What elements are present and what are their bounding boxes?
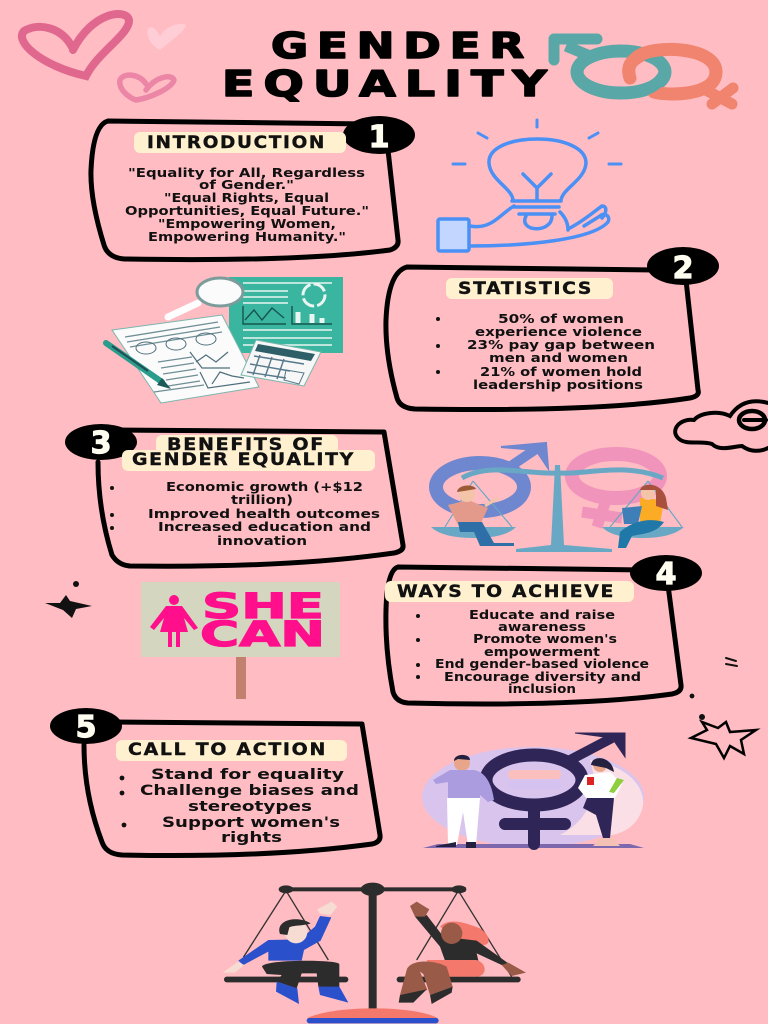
text: slogans: "Empowering Women, [158,217,336,231]
badge: 2 [647,247,719,286]
badge: 4: 4 [656,557,676,592]
scale [431,465,684,552]
illustration: bottom scale with two people [223,883,526,1023]
title: GENDER [271,26,533,67]
panel: introduction [91,116,415,260]
text: ways list: Educate and raise [469,608,615,622]
decoration: scribble blob [675,401,768,451]
panel: ways to achieve [385,555,702,704]
decoration: dashes [691,658,737,697]
magnifier [168,278,243,317]
heading: benefits of gender equality [122,435,375,471]
title: EQUALITY [222,64,556,105]
sign text: SHE [202,587,324,627]
text: action list [120,767,359,846]
badge: 5 [50,708,122,745]
scale frame [224,883,521,1010]
sign post [236,657,246,699]
heading: call to action: CALL TO ACTION [128,740,327,759]
heading: call to action [116,740,347,761]
heading: benefits of gender equality: GENDER EQUALITY [132,450,355,469]
text: benefits list: Improved health outcomes [148,507,380,521]
badge: 1: 1 [369,120,389,155]
sign text: CAN [200,615,325,655]
female symbol [572,454,660,527]
icon: large heart [22,14,129,76]
text: statistics list: leadership positions [473,378,643,392]
illustration: balance with man and woman [431,443,684,552]
sign board [141,582,340,657]
ground [423,844,644,848]
text: benefits list: Economic growth (+$12 [166,480,363,494]
icon: light bulb in hand [438,120,621,251]
text: slogans: "Equality for All, Regardless [128,166,365,180]
text: benefits list: innovation [217,534,307,548]
text: action list: Stand for equality [151,767,345,783]
text: ways list [416,608,649,696]
woman on scale [399,902,526,1004]
text: slogans: Opportunities, Equal Future." [125,204,369,218]
heading: introduction [134,132,346,153]
illustration: report documents [106,277,343,403]
text: statistics list: 50% of women [498,312,624,326]
text: slogans: of Gender." [199,178,294,192]
text: statistics list: 21% of women hold [480,365,642,379]
man [448,486,514,546]
icon: small heart [120,75,174,100]
text: action list: stereotypes [188,799,312,815]
calculator [241,340,321,386]
text: action list: Support women's [162,815,340,831]
panel: statistics [386,247,719,410]
paper sheet [112,315,259,403]
text: statistics list: 23% pay gap between [467,338,655,352]
text: ways list: awareness [498,620,586,634]
illustration: she can sign [141,582,340,699]
woman [618,485,668,548]
pen [106,343,171,389]
heading: ways to achieve [385,581,634,602]
male symbol [436,443,548,511]
icon: gender symbols [554,39,733,104]
gender symbol [486,733,625,844]
text: statistics list [436,312,655,392]
text: benefits list [110,480,380,548]
scale base [307,1008,439,1023]
decoration: right star [691,714,756,758]
badge: 1 [343,116,415,155]
heading: statistics: STATISTICS [458,279,593,298]
icon: woman figure [150,595,198,647]
text: ways list: Promote women's [473,632,617,646]
heading: statistics [446,278,613,299]
text: ways list: Encourage diversity and [444,670,641,684]
text: slogans: Empowering Humanity." [148,230,346,244]
teal chart board [229,277,343,353]
background blob [422,747,644,847]
title [222,26,556,105]
heading: introduction: INTRODUCTION [147,133,326,152]
icon: female symbol [629,49,733,104]
badge: 5: 5 [76,710,96,745]
text: benefits list: trillion) [231,493,293,507]
text: ways list: empowerment [484,645,600,659]
icon: faint heart [147,24,186,50]
decoration: left star [45,581,92,618]
man on scale [223,902,348,1004]
woman [578,758,624,846]
text: slogans [125,166,369,244]
text: action list: rights [221,830,282,846]
text: benefits list: Increased education and [158,520,371,534]
badge: 3: 3 [91,426,111,461]
icon: ring overlap [636,68,665,92]
icon: male symbol [554,39,665,93]
text: statistics list: experience violence [475,325,642,339]
badge: 4 [630,555,702,592]
badge: 3 [65,424,137,461]
text: statistics list: men and women [489,351,628,365]
text: ways list: End gender-based violence [435,657,649,671]
badge: 2: 2 [673,251,693,286]
text: slogans: "Equal Rights, Equal [164,191,329,205]
panel: benefits [65,424,403,566]
panel: call to action [50,708,380,856]
illustration: man and woman with gender symbol [422,733,644,848]
heading: ways to achieve: WAYS TO ACHIEVE [397,582,615,601]
man [433,755,494,848]
equals sign [508,770,561,789]
sign text [200,587,325,655]
heading: benefits of gender equality: BENEFITS OF [167,435,325,454]
text: ways list: inclusion [508,682,576,696]
text: action list: Challenge biases and [140,783,359,799]
